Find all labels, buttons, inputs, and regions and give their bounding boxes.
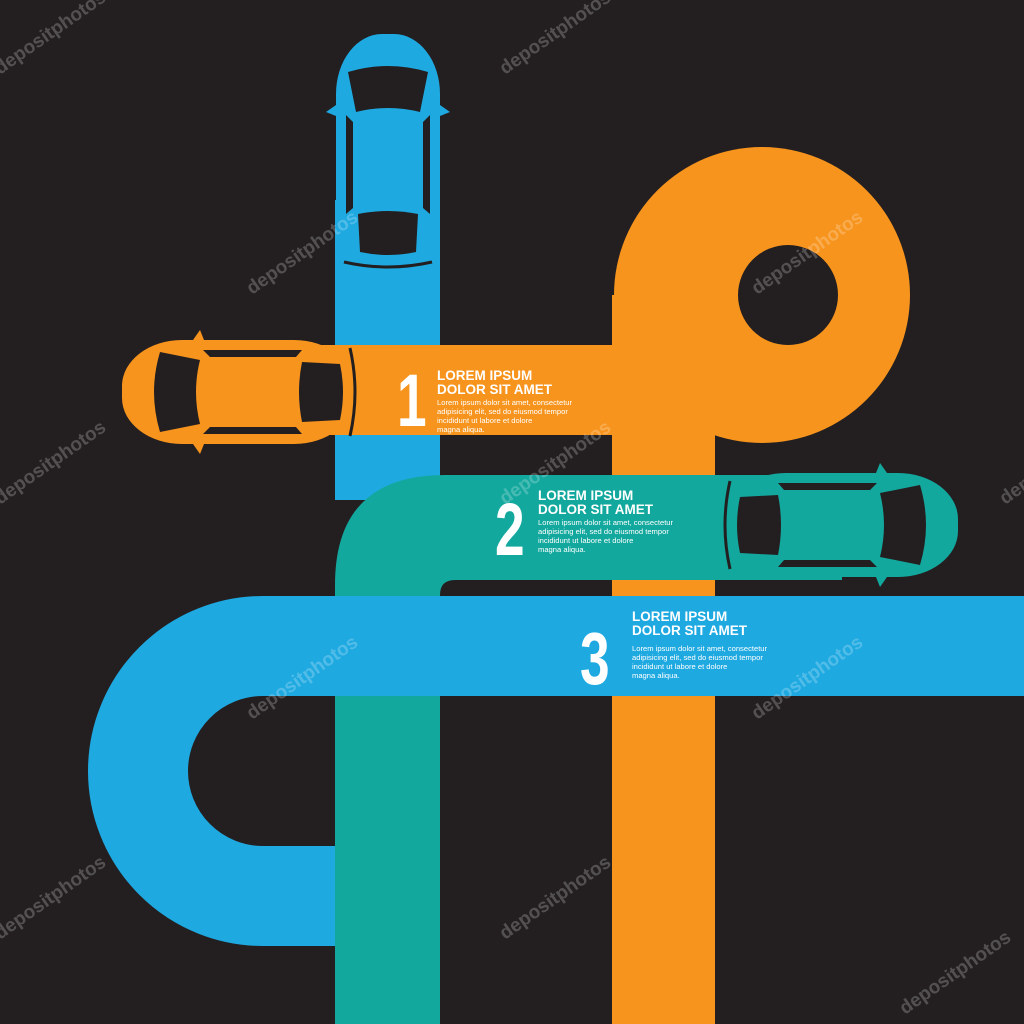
step 1 text: LOREM IPSUM: [437, 368, 532, 383]
step 3 text: magna aliqua.: [632, 671, 680, 680]
step 3 text: incididunt ut labore et dolore: [632, 662, 727, 671]
step 1 text: magna aliqua.: [437, 425, 485, 434]
car: orange: [122, 330, 355, 454]
step 2 text: adipisicing elit, sed do eiusmod tempor: [538, 527, 669, 536]
road: teal curve: [335, 475, 842, 1024]
road: orange loop: [200, 147, 910, 1024]
step 3 text: DOLOR SIT AMET: [632, 623, 748, 638]
step 2 text: DOLOR SIT AMET: [538, 502, 654, 517]
step 1 text: incididunt ut labore et dolore: [437, 416, 532, 425]
car: teal: [725, 463, 958, 587]
step 2 text: magna aliqua.: [538, 545, 586, 554]
watermarks: depositphotos: [496, 852, 615, 944]
step 3 text: [580, 609, 768, 700]
step 3 text: Lorem ipsum dolor sit amet, consectetur: [632, 644, 768, 653]
step 1 text: 1: [397, 359, 427, 442]
watermarks: depositphotos: [243, 207, 362, 299]
step 2 text: Lorem ipsum dolor sit amet, consectetur: [538, 518, 674, 527]
watermarks: depositphotos: [896, 927, 1015, 1019]
road: blue loop: [138, 646, 1024, 896]
step 2 text: LOREM IPSUM: [538, 488, 633, 503]
watermarks: depositphotos: [496, 417, 615, 509]
step 1 text: DOLOR SIT AMET: [437, 382, 553, 397]
step 3 text: LOREM IPSUM: [632, 609, 727, 624]
step 2 text: [495, 488, 674, 571]
step 2 text: incididunt ut labore et dolore: [538, 536, 633, 545]
watermarks: depositphotos: [748, 632, 867, 724]
step 1 text: Lorem ipsum dolor sit amet, consectetur: [437, 398, 573, 407]
watermarks: depositphotos: [748, 207, 867, 299]
step 1 text: [397, 359, 573, 442]
step 1 text: adipisicing elit, sed do eiusmod tempor: [437, 407, 568, 416]
road: blue vertical: [335, 200, 440, 500]
watermarks: depositphotos: [243, 632, 362, 724]
step 3 text: adipisicing elit, sed do eiusmod tempor: [632, 653, 763, 662]
car: blue: [326, 34, 450, 267]
step 2 text: 2: [495, 488, 525, 571]
step 3 text: 3: [580, 617, 610, 700]
